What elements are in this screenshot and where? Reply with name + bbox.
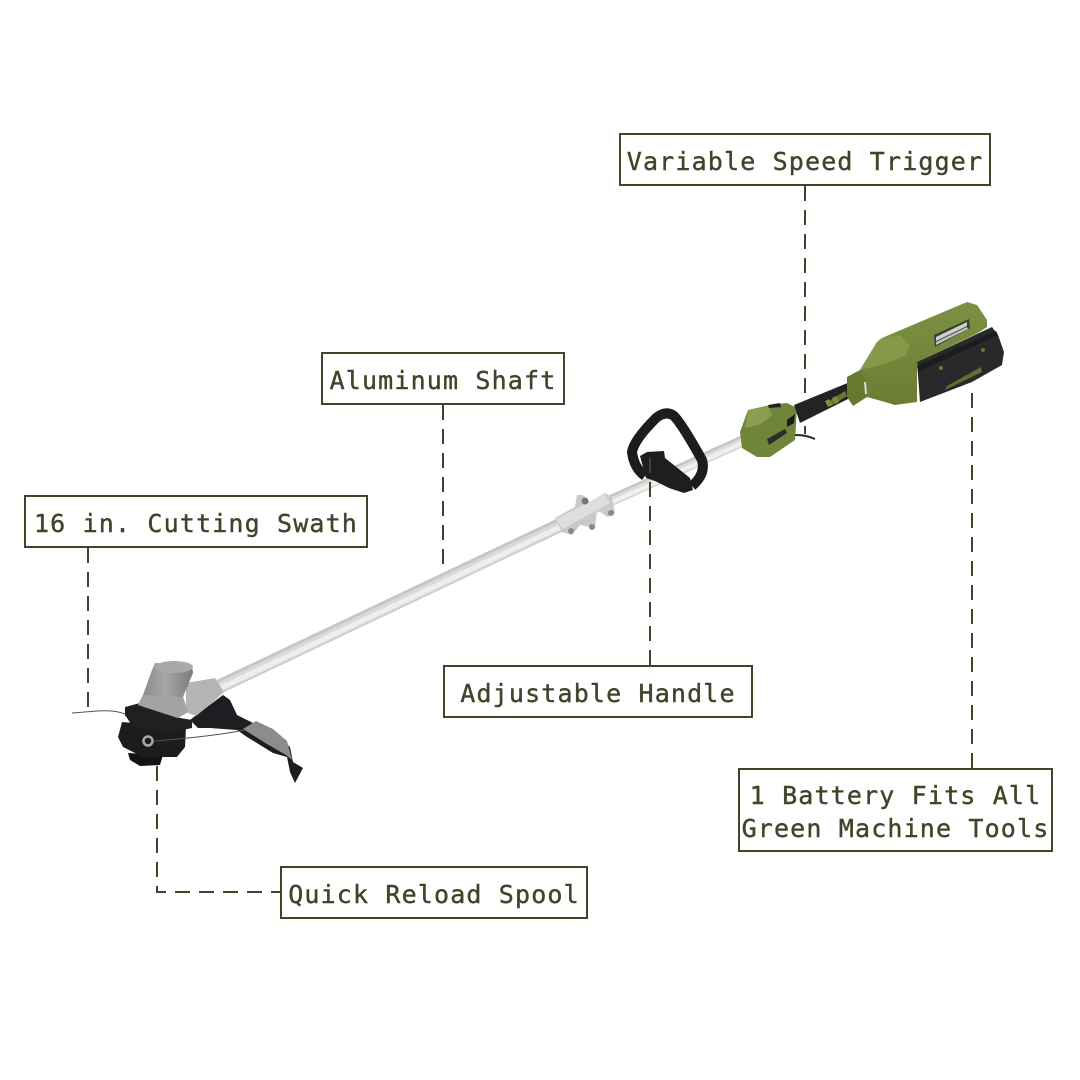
trimmer line	[72, 711, 245, 741]
label: adjustable handle: Adjustable Handle	[460, 678, 736, 708]
cutter guard	[190, 695, 303, 783]
trigger housing	[740, 403, 815, 457]
line spool	[118, 703, 192, 766]
label: variable speed trigger: Variable Speed Trigger	[627, 146, 983, 176]
label: battery compatibility: 1 Battery Fits All	[750, 780, 1041, 810]
label: quick reload spool	[280, 866, 588, 919]
leader: aluminum shaft	[442, 405, 444, 570]
adjustable handle loop	[632, 413, 703, 493]
battery pack	[917, 327, 1004, 402]
leader: variable speed trigger	[804, 186, 806, 434]
aluminum shaft	[212, 438, 749, 692]
label: battery compatibility: Green Machine Tools	[742, 814, 1049, 842]
label: battery compatibility	[738, 768, 1053, 852]
label plate	[934, 319, 970, 347]
shaft mount	[186, 678, 224, 716]
leader: adjustable handle	[649, 452, 651, 665]
label: 16 in. cutting swath: 16 in. Cutting Swath	[34, 508, 358, 538]
motor cap	[138, 661, 193, 718]
label: aluminum shaft: Aluminum Shaft	[330, 366, 556, 394]
label: quick reload spool: Quick Reload Spool	[288, 880, 580, 908]
label: 16 in. cutting swath	[24, 495, 368, 548]
label: variable speed trigger	[619, 133, 991, 186]
shaft coupler	[555, 493, 615, 535]
motor body	[847, 302, 987, 406]
string trimmer product illustration	[72, 302, 1004, 783]
leader: cutting swath	[87, 548, 89, 713]
leader: quick reload spool	[157, 766, 281, 892]
leader: battery	[971, 390, 973, 768]
black grip	[794, 382, 850, 423]
label: aluminum shaft	[321, 352, 565, 405]
label: adjustable handle	[443, 665, 753, 718]
